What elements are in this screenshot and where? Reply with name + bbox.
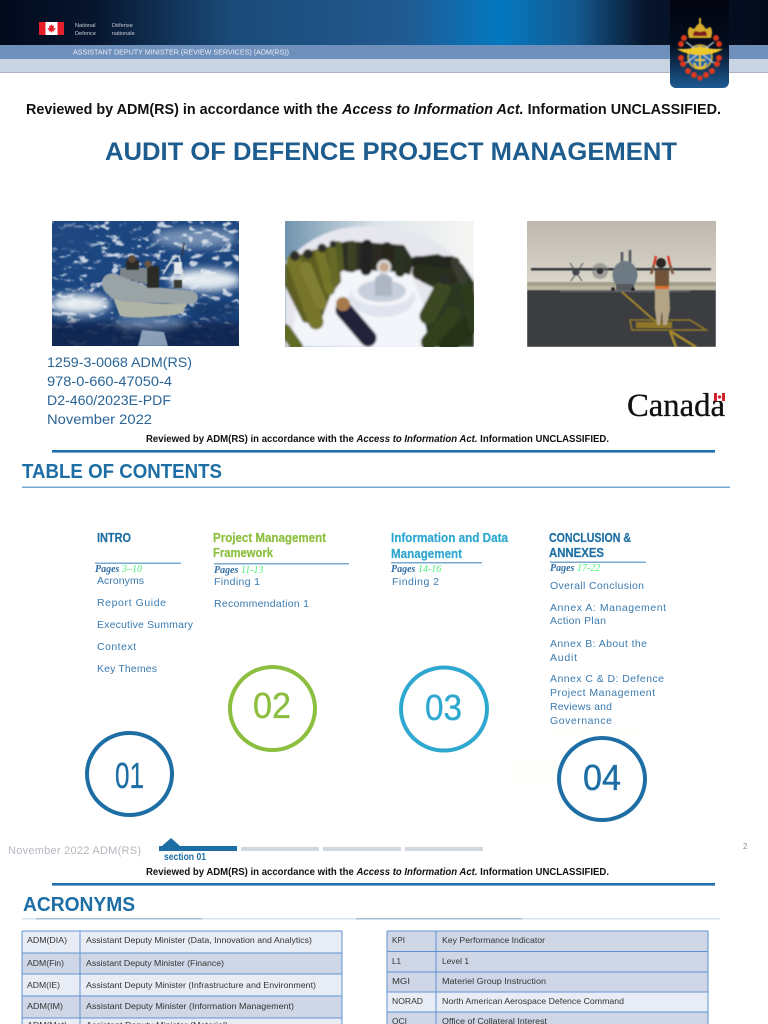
- panel: conclusion and annexes: Annex B: About the: [550, 638, 647, 650]
- table: acronyms left: Assistant Deputy Minister (Finance): [86, 958, 224, 968]
- panel: conclusion and annexes: Annex A: Management: [550, 602, 666, 614]
- panel: intro: [95, 530, 194, 675]
- table: acronyms left: Assistant Deputy Minister (Infrastructure and Environment): [86, 980, 316, 990]
- icon: Canadian flag: [39, 22, 64, 35]
- panel: conclusion and annexes: Audit: [550, 652, 577, 664]
- panel: conclusion and annexes: ANNEXES: [549, 545, 604, 560]
- Canada wordmark: Canada: [627, 388, 725, 424]
- person in shelter: [375, 272, 392, 296]
- panel: project management framework: Finding 1: [214, 576, 260, 588]
- photo: inflatable boat at sea: [52, 221, 239, 346]
- panel: information and data management: Pages 14-16: [391, 564, 441, 575]
- department name: [75, 23, 135, 37]
- heading: table of contents: TABLE OF CONTENTS: [22, 461, 222, 483]
- panel: project management framework: Pages 11-13: [214, 565, 264, 576]
- table: acronyms left: ADM(DIA): [27, 935, 67, 945]
- document identifiers: 978-0-660-47050-4: [47, 373, 172, 389]
- table: acronyms right: Level 1: [442, 956, 469, 966]
- panel: conclusion and annexes: Reviews and: [550, 701, 612, 713]
- faint image patches near section 04: [512, 730, 640, 783]
- panel: information and data management: Management: [391, 546, 463, 561]
- panel: intro: Pages 3–10: [95, 564, 142, 575]
- document identifiers: [47, 354, 192, 427]
- document identifiers: November 2022: [47, 411, 152, 427]
- page number: 2: [743, 842, 748, 851]
- table: acronyms right: MGI: [392, 976, 410, 986]
- panel: intro: Key Themes: [97, 663, 157, 675]
- table: acronyms right: Materiel Group Instruction: [442, 976, 546, 986]
- section badge 03: [401, 668, 487, 750]
- department name: Defence: [75, 31, 96, 37]
- soldiers back row: [285, 245, 474, 347]
- icon: CAF crest: [670, 0, 729, 88]
- access review notice: top: Reviewed by ADM(RS) in accordance with the Access to Information Act. Information UNCLASSIFIED.: [26, 101, 721, 118]
- department name: Défense: [112, 23, 133, 29]
- section badge 02: [230, 667, 315, 750]
- table: acronyms right: KPI: [392, 935, 405, 945]
- panel: conclusion and annexes: Pages 17-22: [550, 563, 600, 574]
- soldiers left: [294, 262, 316, 322]
- panel: conclusion and annexes: CONCLUSION &: [549, 530, 631, 545]
- panel: information and data management: [391, 530, 509, 588]
- section progress bar: [159, 838, 483, 863]
- panel: conclusion and annexes: Project Management: [550, 687, 655, 699]
- soldiers right: [428, 290, 442, 316]
- department name: National: [75, 23, 96, 29]
- table: acronyms right: Key Performance Indicator: [442, 935, 545, 945]
- section badge 03: 03: [425, 687, 462, 728]
- panel: information and data management: Information and Data: [391, 530, 509, 545]
- section progress bar: section 01: [164, 852, 206, 863]
- header banner: [0, 0, 768, 88]
- heading: acronyms: ACRONYMS: [23, 894, 135, 916]
- title: AUDIT OF DEFENCE PROJECT MANAGEMENT: [105, 138, 677, 166]
- section badge 04: 04: [583, 757, 621, 798]
- table: acronyms right: L1: [392, 956, 401, 966]
- table: acronyms left: ADM(Fin): [27, 958, 64, 968]
- person lying: [344, 310, 368, 338]
- marshaller: [651, 265, 673, 274]
- soldier crowd masses: [285, 244, 341, 326]
- section badge 01: 01: [115, 755, 144, 796]
- photo: aircraft marshaller on runway: [527, 221, 716, 347]
- panel: intro: Acronyms: [97, 575, 144, 587]
- table: acronyms left: ADM(IM): [27, 1001, 63, 1011]
- panel: intro: Context: [97, 641, 136, 653]
- access review notice: page 1 footer: Reviewed by ADM(RS) in accordance with the Access to Information Act. Information UNCLASSIFIED.: [146, 434, 609, 445]
- panel: conclusion and annexes: [549, 530, 666, 727]
- panel: project management framework: Project Management: [213, 530, 327, 545]
- panel: conclusion and annexes: Governance: [550, 715, 612, 727]
- organization name: ASSISTANT DEPUTY MINISTER (REVIEW SERVICES) (ADM(RS)): [73, 48, 289, 56]
- table: acronyms right: NORAD: [392, 996, 423, 1006]
- panel: information and data management: Finding 2: [392, 576, 439, 588]
- section badge 01: [87, 733, 172, 815]
- document identifiers: D2-460/2023E-PDF: [47, 392, 171, 408]
- access review notice: page 2 header: Reviewed by ADM(RS) in accordance with the Access to Information Act. Information UNCLASSIFIED.: [146, 867, 609, 878]
- table: acronyms left: Assistant Deputy Minister (Data, Innovation and Analytics): [86, 935, 312, 945]
- panel: project management framework: Framework: [213, 545, 274, 560]
- table: acronyms left: [22, 931, 342, 1024]
- table: acronyms right: North American Aerospace Defence Command: [442, 996, 624, 1006]
- panel: conclusion and annexes: Annex C & D: Defence: [550, 673, 664, 685]
- snow shelter: [349, 293, 415, 317]
- table: acronyms left: ADM(IE): [27, 980, 60, 990]
- section badge 04: [559, 738, 645, 820]
- panel: conclusion and annexes: Overall Conclusion: [550, 580, 644, 592]
- footer date: November 2022 ADM(RS): [8, 845, 141, 857]
- panel: conclusion and annexes: Action Plan: [550, 615, 606, 627]
- table: acronyms left: Assistant Deputy Minister (Information Management): [86, 1001, 294, 1011]
- photo: soldiers around snow shelter: [285, 221, 474, 347]
- panel: project management framework: Recommendation 1: [214, 598, 309, 610]
- table: acronyms right: [387, 931, 708, 1024]
- department name: nationale: [112, 31, 135, 37]
- document identifiers: 1259-3-0068 ADM(RS): [47, 354, 192, 370]
- helmets: [290, 240, 451, 285]
- section badge 02: 02: [253, 685, 291, 726]
- panel: intro: Report Guide: [97, 597, 166, 609]
- panel: intro: INTRO: [97, 530, 131, 545]
- panel: intro: Executive Summary: [97, 619, 194, 631]
- panel: project management framework: [213, 530, 349, 610]
